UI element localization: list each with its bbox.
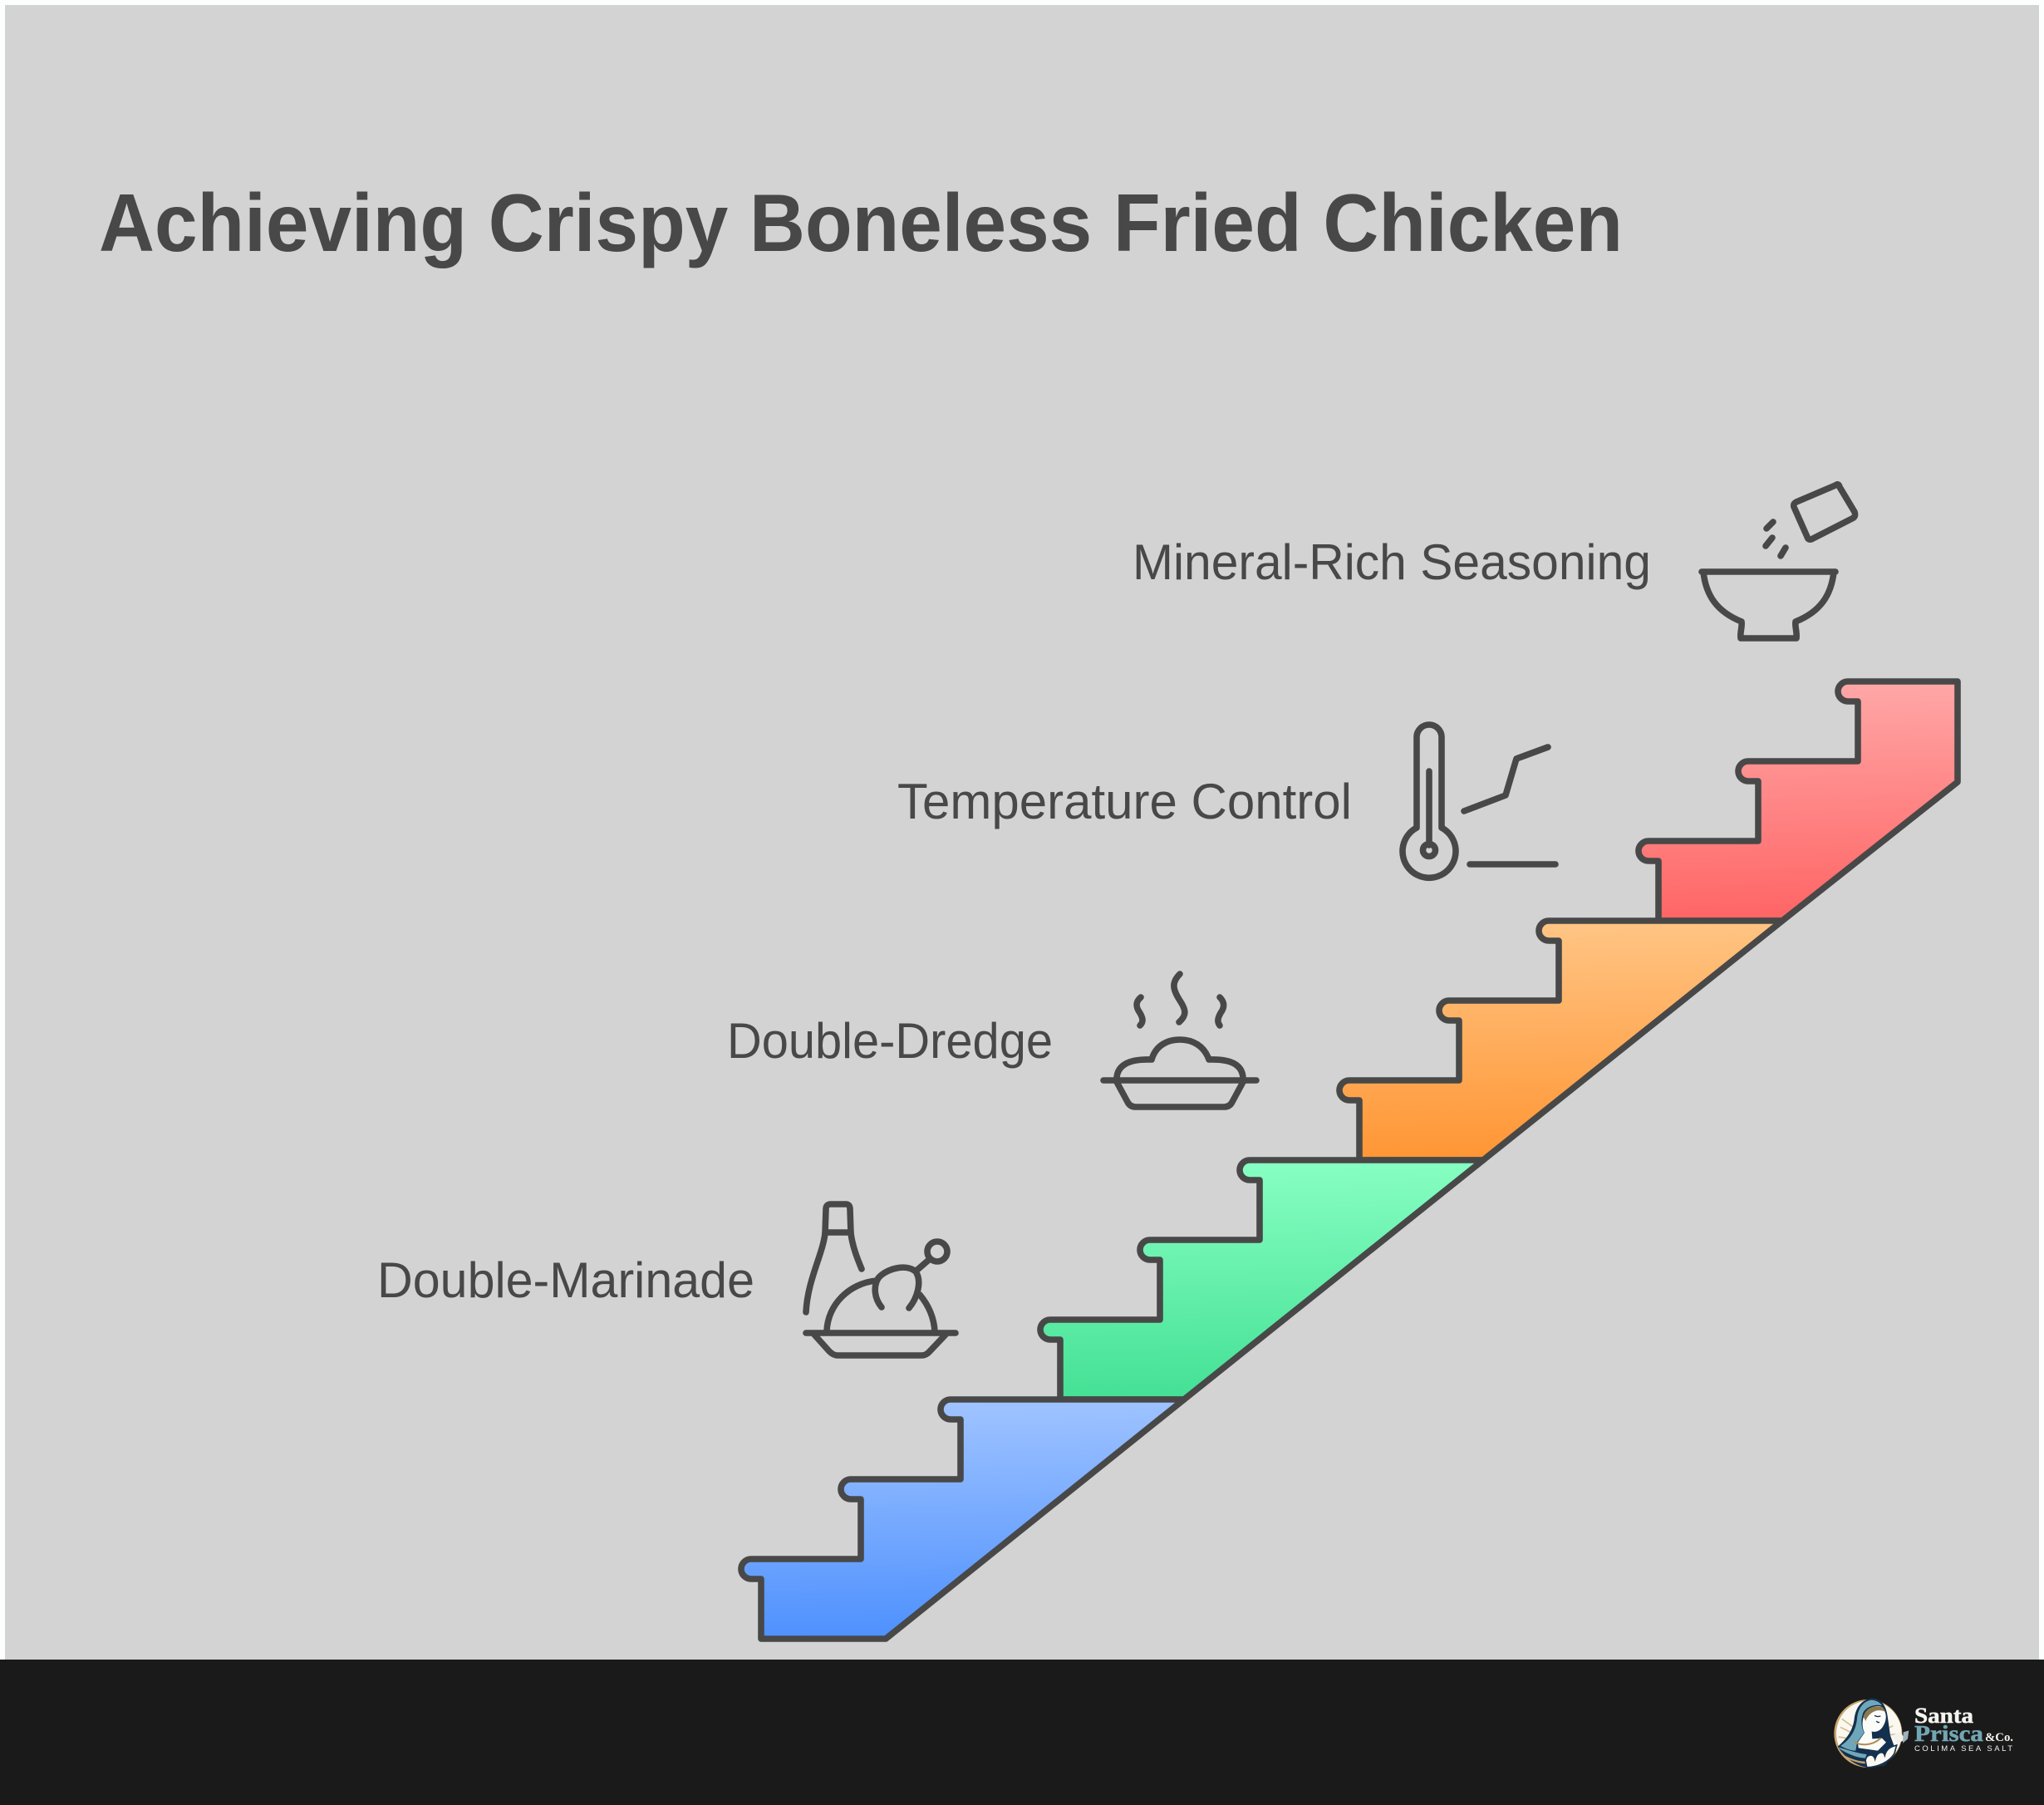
stair section: blue [741, 1399, 1184, 1639]
title: Achieving Crispy Boneless Fried Chicken [99, 177, 1623, 268]
stair section: green [1040, 1160, 1483, 1399]
icon: bottle and roast chicken [806, 1204, 956, 1355]
footer bar [0, 1660, 2044, 1805]
logo wordmark: santa: Santa [1914, 1704, 1973, 1728]
icon: salt shaker over bowl [1702, 484, 1855, 638]
logo wordmark: prisca: Prisca [1914, 1721, 1984, 1746]
stair section: red [1639, 681, 1958, 921]
logo emblem [1834, 1698, 1909, 1768]
label: temperature control: Temperature Control [897, 774, 1352, 829]
label: mineral-rich seasoning: Mineral-Rich Seasoning [1133, 534, 1651, 590]
label: double-marinade: Double-Marinade [377, 1252, 754, 1308]
staircase [741, 681, 1958, 1639]
icon: steaming dredge dish [1103, 974, 1256, 1107]
logo: santa prisca and co [1834, 1698, 2013, 1768]
stair section: orange [1339, 921, 1782, 1160]
label: double-dredge: Double-Dredge [727, 1013, 1053, 1069]
icon: thermometer with curve [1403, 725, 1555, 878]
logo wordmark: and co: &Co. [1985, 1731, 2013, 1744]
logo tagline: COLIMA SEA SALT [1914, 1744, 2012, 1753]
